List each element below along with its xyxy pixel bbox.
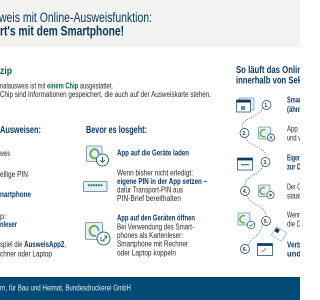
heading: Prinzip: zip: [0, 66, 12, 77]
dotted path: [243, 108, 266, 245]
panel: Bevor es losgeht: [84, 125, 207, 258]
icon: window step 3: [238, 158, 252, 170]
text: app öffnen: [117, 214, 195, 258]
text: app öffnen: oder Laptop koppeln: [117, 248, 176, 258]
text: PIN setzen: eigene PIN in der App setzen –: [117, 177, 207, 186]
text: app öffnen: Bei Verwendung des Smart-: [117, 222, 194, 232]
text: chip description: nalausweis ist mit einem Chip ausgestattet.: [0, 82, 113, 90]
icon: browser windows: [236, 98, 254, 112]
icon: app step 5: [238, 213, 255, 229]
icon: app step 2: [258, 127, 275, 141]
text: PIN setzen: dafür Transport-PIN aus: [117, 186, 183, 194]
title line 1: weis mit Online-Ausweisfunktion:: [0, 10, 152, 25]
list: requirements: p:: [0, 212, 6, 221]
footer credit: rn, für Bau und Heimat, Bundesdruckerei GmbH: [0, 284, 131, 292]
list: requirements: weis: [0, 149, 10, 158]
heading: Bevor es losgeht: Bevor es losgeht:: [86, 125, 147, 136]
step markers: 3.: [263, 160, 268, 166]
header band: [0, 0, 300, 47]
list: requirements: chner oder Laptop: [0, 250, 52, 258]
step markers: 6.: [243, 247, 248, 253]
text: chip description: Chip sind Informationen gespeichert, die auch auf der Ausweiskarte stehen.: [0, 90, 211, 99]
footer: [0, 277, 300, 300]
text: app öffnen: Smartphone mit Rechner: [117, 240, 188, 248]
heading: steps: [236, 65, 302, 86]
step markers: 2.: [242, 131, 247, 137]
heading: Ausweisen: Ausweisen:: [0, 125, 41, 136]
text: app öffnen: App auf den Geräten öffnen: [117, 214, 195, 222]
panel: So läuft das Online-Ausweisen: [236, 65, 302, 258]
text: PIN setzen: [117, 168, 207, 203]
step markers: 4.: [243, 189, 248, 195]
icon: app open: [86, 222, 110, 245]
icon: card tilted: [271, 227, 287, 241]
step markers: [240, 100, 271, 254]
list: requirements: nleser: [0, 220, 17, 229]
text: PIN setzen: Wenn bisher nicht erledigt:: [117, 168, 193, 178]
title line 2: rt's mit dem Smartphone!: [0, 24, 124, 38]
list: requirements: spiel die AusweisApp2,: [0, 240, 66, 249]
list: requirements: ellige PIN: [0, 170, 28, 179]
icon: window step 6: [258, 244, 272, 256]
icon: app download: [86, 146, 108, 166]
list: requirements: [0, 149, 66, 258]
icon: PIN field: ******: [88, 185, 103, 191]
step texts: [287, 96, 302, 258]
text: app laden: App auf die Geräte laden: [117, 148, 189, 158]
step markers: 1.: [264, 103, 269, 109]
step markers: 5.: [264, 219, 269, 225]
icon: app step 4: [258, 185, 274, 199]
text: chip description: [0, 82, 211, 99]
text: app öffnen: phones als Kartenleser:: [117, 231, 183, 240]
panel: zum Ausweisen: [0, 125, 66, 258]
panel: Prinzip: [0, 66, 211, 99]
text: PIN setzen: PIN-Brief bereithalten: [117, 194, 181, 203]
list: requirements: nartphone: [0, 190, 31, 199]
